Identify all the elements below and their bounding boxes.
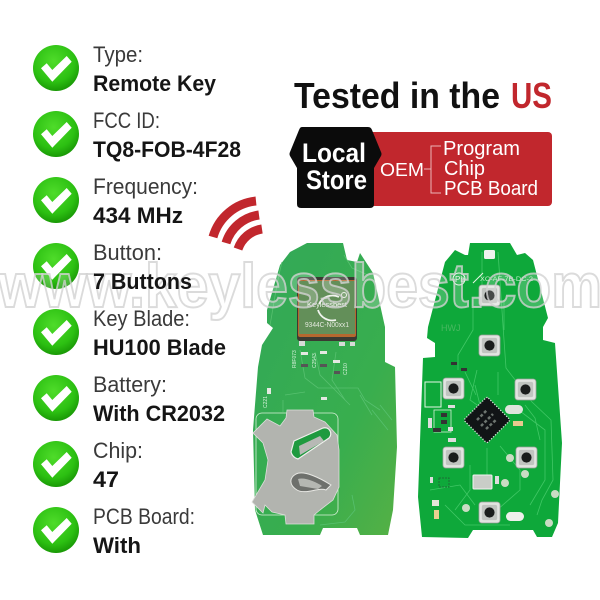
spec: frequency: Frequency:: [93, 174, 198, 199]
spec: type: [93, 42, 217, 96]
program list: Chip: [444, 158, 485, 180]
LED: [484, 250, 495, 259]
silkscreen marks: Pb: [455, 275, 465, 284]
board traces left: [270, 255, 392, 525]
black local store tag: [290, 127, 382, 208]
spec: frequency: 434 MHz: [93, 203, 183, 228]
local store text: Local: [302, 138, 366, 168]
board outline right: [418, 243, 562, 538]
silkscreen marks: XC-AF-7B-DC-2: [480, 276, 533, 283]
surface components: [428, 362, 559, 527]
spec: button: [93, 240, 192, 294]
bracket: [424, 146, 441, 193]
spec: key blade: HU100 Blade: [93, 335, 226, 360]
silkscreen labels left: C2543: [312, 353, 318, 368]
spec: key blade: Key Blade:: [93, 306, 190, 331]
badge: Local Store OEM: [290, 127, 552, 208]
spec: key blade: [93, 306, 226, 360]
program list: [443, 138, 538, 200]
silkscreen labels left: R8F073: [292, 350, 298, 368]
battery holder outline: [256, 413, 338, 515]
local store text: Store: [306, 165, 367, 195]
program list: Program: [443, 138, 520, 160]
silkscreen marks: [425, 273, 533, 432]
board traces right: [430, 252, 553, 525]
spec: FCC ID: FCC ID:: [93, 108, 160, 133]
title: US: [511, 75, 552, 116]
processor chip: [464, 397, 510, 443]
tactile buttons: [443, 285, 537, 523]
spec: battery: With CR2032: [93, 401, 225, 426]
board outline left: [253, 243, 397, 535]
spec: PCB board: With: [93, 533, 141, 558]
icon: red wireless signal: [213, 201, 262, 249]
check icons: [33, 45, 79, 553]
spec: battery: Battery:: [93, 372, 167, 397]
silkscreen labels left: [263, 350, 349, 408]
spec: chip: Chip:: [93, 438, 143, 463]
spec: chip: [93, 438, 143, 492]
local store text: [302, 138, 367, 195]
small components left: [267, 351, 340, 400]
spec: FCC ID: [93, 108, 241, 162]
spec: button: Button:: [93, 240, 162, 265]
RF module chip: Keylessbest: [307, 302, 347, 309]
program list: PCB Board: [444, 178, 538, 200]
spec: type: Remote Key: [93, 71, 217, 96]
battery clip: [252, 410, 339, 524]
silkscreen labels left: C210: [343, 363, 349, 375]
spec: PCB board: [93, 504, 195, 558]
spec: type: Type:: [93, 42, 143, 67]
spec: battery: [93, 372, 225, 426]
title: Tested in the: [294, 75, 500, 116]
OEM label: OEM: [380, 160, 424, 180]
spec: FCC ID: TQ8-FOB-4F28: [93, 137, 241, 162]
silkscreen marks: HWJ: [441, 323, 460, 333]
RF module chip: 9344C-N00xx1: [305, 322, 349, 329]
RF module chip: [297, 277, 357, 346]
spec: frequency: [93, 174, 198, 228]
silkscreen labels left: C221: [263, 396, 269, 408]
panel: PCB back with buttons and processor: [418, 243, 562, 538]
spec list: [93, 42, 241, 558]
red panel: [368, 132, 552, 206]
spec: PCB board: PCB Board:: [93, 504, 195, 529]
spec: button: 7 Buttons: [93, 269, 192, 294]
spec: chip: 47: [93, 467, 119, 492]
panel: PCB front with module and battery clip: [252, 243, 397, 535]
